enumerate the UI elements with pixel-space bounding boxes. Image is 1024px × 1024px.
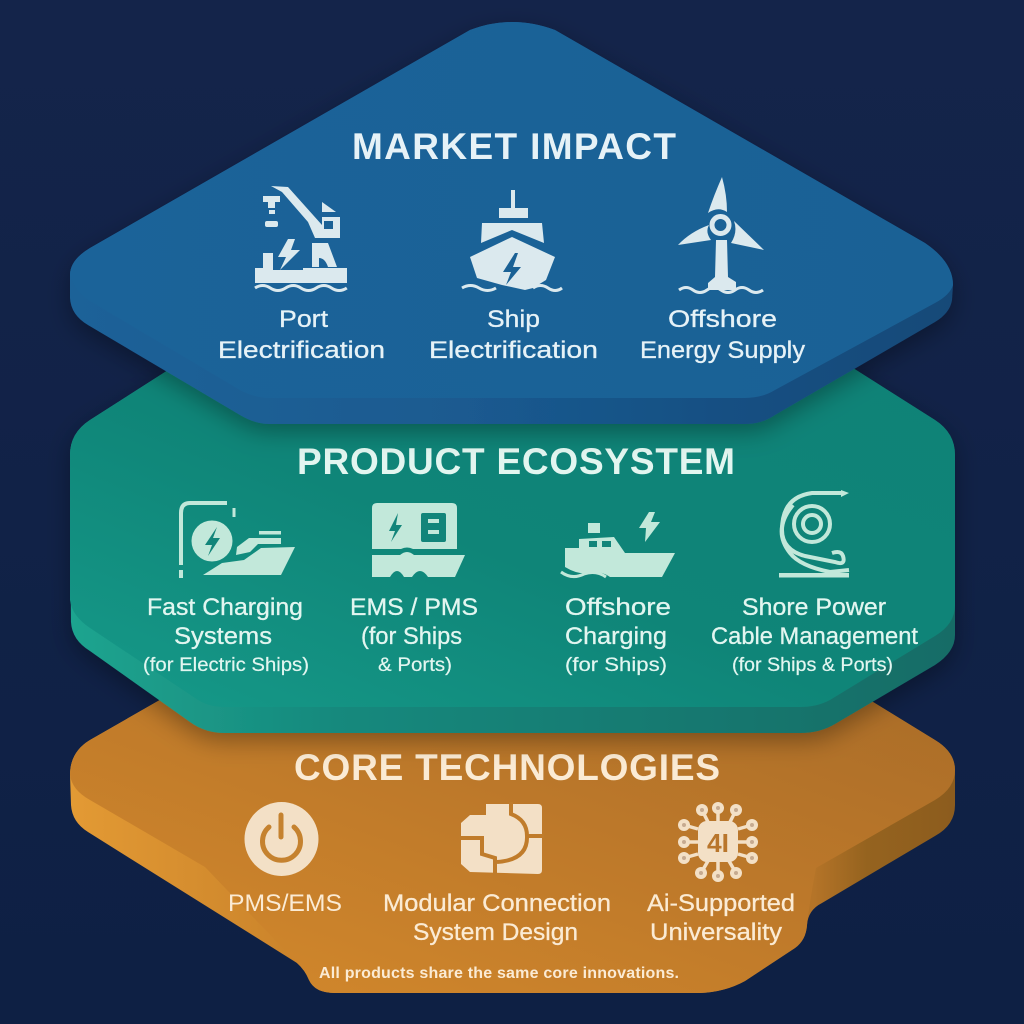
heading: market impact: MARKET IMPACT [352,126,676,167]
label: modular connection: System Design [413,919,578,946]
label: offshore energy supply: Offshore [668,306,777,333]
label: EMS / PMS [350,594,478,676]
slab body: market impact [70,22,953,424]
label: EMS / PMS: (for Ships [361,623,462,650]
label: ship electrification: Electrification [429,337,598,364]
slab body: product ecosystem [70,342,955,733]
label: offshore charging: Offshore [565,594,671,621]
label: offshore energy supply: Energy Supply [640,337,805,364]
label: PMS/EMS: PMS/EMS [228,890,342,917]
label: ship electrification [429,306,598,364]
label: fast charging systems: (for Electric Ships) [143,654,309,676]
label: offshore charging: Charging [565,623,667,650]
label: ship electrification: Ship [487,306,540,333]
label: port electrification [218,306,385,364]
label: offshore energy supply [640,306,805,364]
label: shore power cable management: (for Ships & Ports) [732,654,893,676]
slab top face: core technologies [70,675,955,993]
icon: shore power cable reel [779,490,849,578]
panel: market impact [70,22,953,424]
label: AI-supported universality: Ai-Supported [647,890,795,917]
panel: product ecosystem [70,342,955,733]
label: offshore charging [565,594,671,676]
icon: offshore wind turbine [678,177,764,292]
icon: port crane [255,186,347,290]
label: fast charging systems: Fast Charging [147,594,303,621]
label: shore power cable management: Cable Management [711,623,918,650]
slab top face: product ecosystem [70,342,955,707]
icon: power button [244,802,318,876]
icon: electric ship [462,190,562,290]
icon: offshore charging ship [561,512,675,577]
icon: modular puzzle blocks [459,802,544,876]
footnote: All products share the same core innovations. [319,965,679,982]
label: fast charging systems: Systems [174,623,272,650]
icon: EMS/PMS cabinet [372,503,465,577]
icon: fast charging ship [179,503,295,578]
label: AI-supported universality: Universality [650,919,782,946]
label: shore power cable management [711,594,918,676]
panel: core technologies [70,675,955,993]
label: EMS / PMS: EMS / PMS [350,594,478,621]
slab top face: market impact [70,22,953,398]
label: shore power cable management: Shore Power [742,594,886,621]
icon: AI chip [678,802,758,882]
label: AI-supported universality [647,890,795,946]
icon: AI chip: 4I [707,828,729,858]
label: port electrification: Port [279,306,328,333]
slab body: core technologies [70,675,955,993]
label: offshore charging: (for Ships) [565,654,667,676]
label: modular connection: Modular Connection [383,890,611,917]
label: port electrification: Electrification [218,337,385,364]
heading: core technologies: CORE TECHNOLOGIES [294,747,720,788]
heading: product ecosystem: PRODUCT ECOSYSTEM [297,441,735,482]
label: modular connection [383,890,611,946]
label: fast charging systems [143,594,309,676]
label: EMS / PMS: & Ports) [378,654,452,676]
